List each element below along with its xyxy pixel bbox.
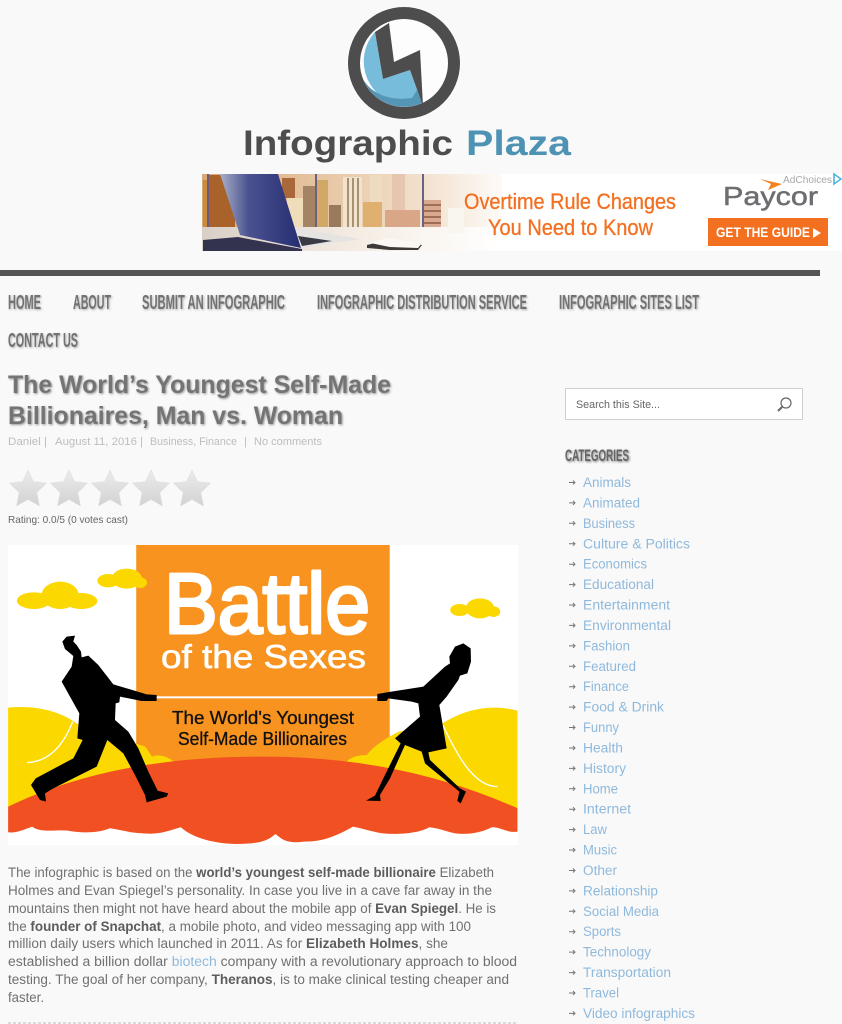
- advertisement banner: [202, 174, 842, 251]
- ad headline: Overtime Rule Changes: [464, 189, 676, 214]
- ad button: get the guide: [708, 218, 828, 246]
- category links: Social Media: [583, 904, 659, 919]
- woman silhouette: [366, 643, 471, 803]
- man silhouette: [31, 636, 168, 802]
- category links: Educational: [583, 577, 654, 592]
- article paragraph: established a billion dollar biotech company with a revolutionary approach to blood: [8, 954, 517, 969]
- category links: Business: [583, 516, 635, 531]
- category links: Culture & Politics: [583, 536, 690, 551]
- post meta: |: [244, 436, 247, 448]
- category links: Funny: [583, 720, 619, 735]
- article title: Billionaires, Man vs. Woman: [8, 402, 343, 430]
- wordmark: Infographic: [243, 124, 453, 163]
- post meta: [8, 436, 322, 448]
- article paragraph: the founder of Snapchat, a mobile photo, and video messaging app with 100: [8, 919, 471, 934]
- nav links: SUBMIT AN INFOGRAPHIC: [142, 292, 285, 314]
- category links: Entertainment: [583, 598, 670, 612]
- category links: [583, 475, 695, 1021]
- article paragraph: faster.: [8, 990, 44, 1005]
- category links: Transportation: [583, 965, 671, 980]
- category links: Other: [583, 863, 618, 878]
- category links: Economics: [583, 557, 647, 572]
- category links: Home: [583, 781, 618, 796]
- yellow hills: [8, 707, 517, 810]
- white hill curves: [27, 722, 498, 787]
- category links: Travel: [583, 986, 619, 1000]
- hero title text: [161, 557, 370, 749]
- category links: Animals: [583, 475, 631, 490]
- category links: Video infographics: [583, 1006, 695, 1021]
- scene artwork: [8, 545, 517, 844]
- hero title text: The World's Youngest: [172, 708, 354, 728]
- categories heading: CATEGORIES: [565, 446, 629, 465]
- yellow clouds: [17, 569, 500, 618]
- tug rope: [156, 696, 378, 698]
- icon: lightning bolt circle: [348, 7, 460, 119]
- icon: magnifier: [778, 398, 791, 411]
- article paragraph: million daily users which launched in 2011. As for Elizabeth Holmes, she: [8, 936, 448, 951]
- orange title panel: [136, 545, 390, 772]
- category links: Animated: [583, 495, 640, 510]
- hero title text: Self-Made Billionaires: [178, 729, 347, 749]
- article paragraph: Holmes and Evan Spiegel’s personality. In case you live in a cave far away in the: [8, 883, 492, 898]
- logo: Infographic Plaza: [243, 7, 572, 163]
- category arrows: [569, 480, 575, 1015]
- category links: Food & Drink: [583, 700, 664, 715]
- ad photo: laptop in city office: [202, 174, 502, 251]
- category links: Law: [583, 822, 607, 837]
- search box: [566, 388, 802, 420]
- article paragraph: The infographic is based on the world’s youngest self-made billionaire Elizabeth: [8, 865, 494, 880]
- category links: Technology: [583, 945, 651, 960]
- ad headline: [464, 189, 676, 240]
- sidebar: categories: [565, 446, 695, 1021]
- nav links: HOME: [8, 292, 41, 314]
- ad headline: You Need to Know: [488, 215, 653, 240]
- article paragraph: mountains then might not have heard about the mobile app of Evan Spiegel. He is: [8, 901, 496, 916]
- search box: Search this Site...: [576, 399, 660, 411]
- nav links: [8, 292, 699, 352]
- post meta: August 11, 2016 |: [55, 436, 143, 448]
- article paragraph: [8, 865, 517, 1005]
- article title: The World’s Youngest Self-Made: [8, 371, 391, 399]
- nav links: INFOGRAPHIC DISTRIBUTION SERVICE: [317, 292, 527, 314]
- stars: [10, 470, 210, 506]
- category links: Featured: [583, 659, 636, 674]
- adchoices mark: AdChoices: [783, 174, 832, 186]
- red ground with scalloped edge: [8, 757, 517, 844]
- post meta: No comments: [254, 436, 322, 448]
- rating text: Rating: 0.0/5 (0 votes cast): [8, 514, 128, 526]
- hero title text: Battle: [164, 557, 370, 652]
- wordmark: Plaza: [466, 124, 572, 163]
- category links: Finance: [583, 679, 629, 694]
- category links: Internet: [583, 802, 631, 817]
- category links: Fashion: [583, 638, 630, 653]
- nav links: CONTACT US: [8, 330, 78, 352]
- nav links: ABOUT: [73, 292, 111, 314]
- category links: History: [583, 761, 626, 776]
- category links: Environmental: [583, 618, 671, 633]
- category links: Relationship: [583, 883, 658, 898]
- category links: Sports: [583, 924, 621, 939]
- hero image: Battle of the Sexes: [8, 545, 518, 845]
- hero title text: of the Sexes: [161, 638, 366, 675]
- category links: Music: [583, 842, 617, 858]
- ad button: get the guide: GET THE GUIDE: [716, 224, 810, 240]
- navigation menu: [0, 270, 820, 352]
- article paragraph: testing. The goal of her company, Theranos, is to make clinical testing cheaper and: [8, 972, 509, 987]
- ad logo: Paycor: Paycor: [723, 181, 818, 211]
- nav links: INFOGRAPHIC SITES LIST: [559, 292, 699, 314]
- article title: [8, 371, 391, 430]
- post meta: Business, Finance: [150, 436, 237, 448]
- category links: Health: [583, 740, 623, 756]
- post meta: Daniel |: [8, 436, 47, 448]
- star rating: [8, 470, 210, 526]
